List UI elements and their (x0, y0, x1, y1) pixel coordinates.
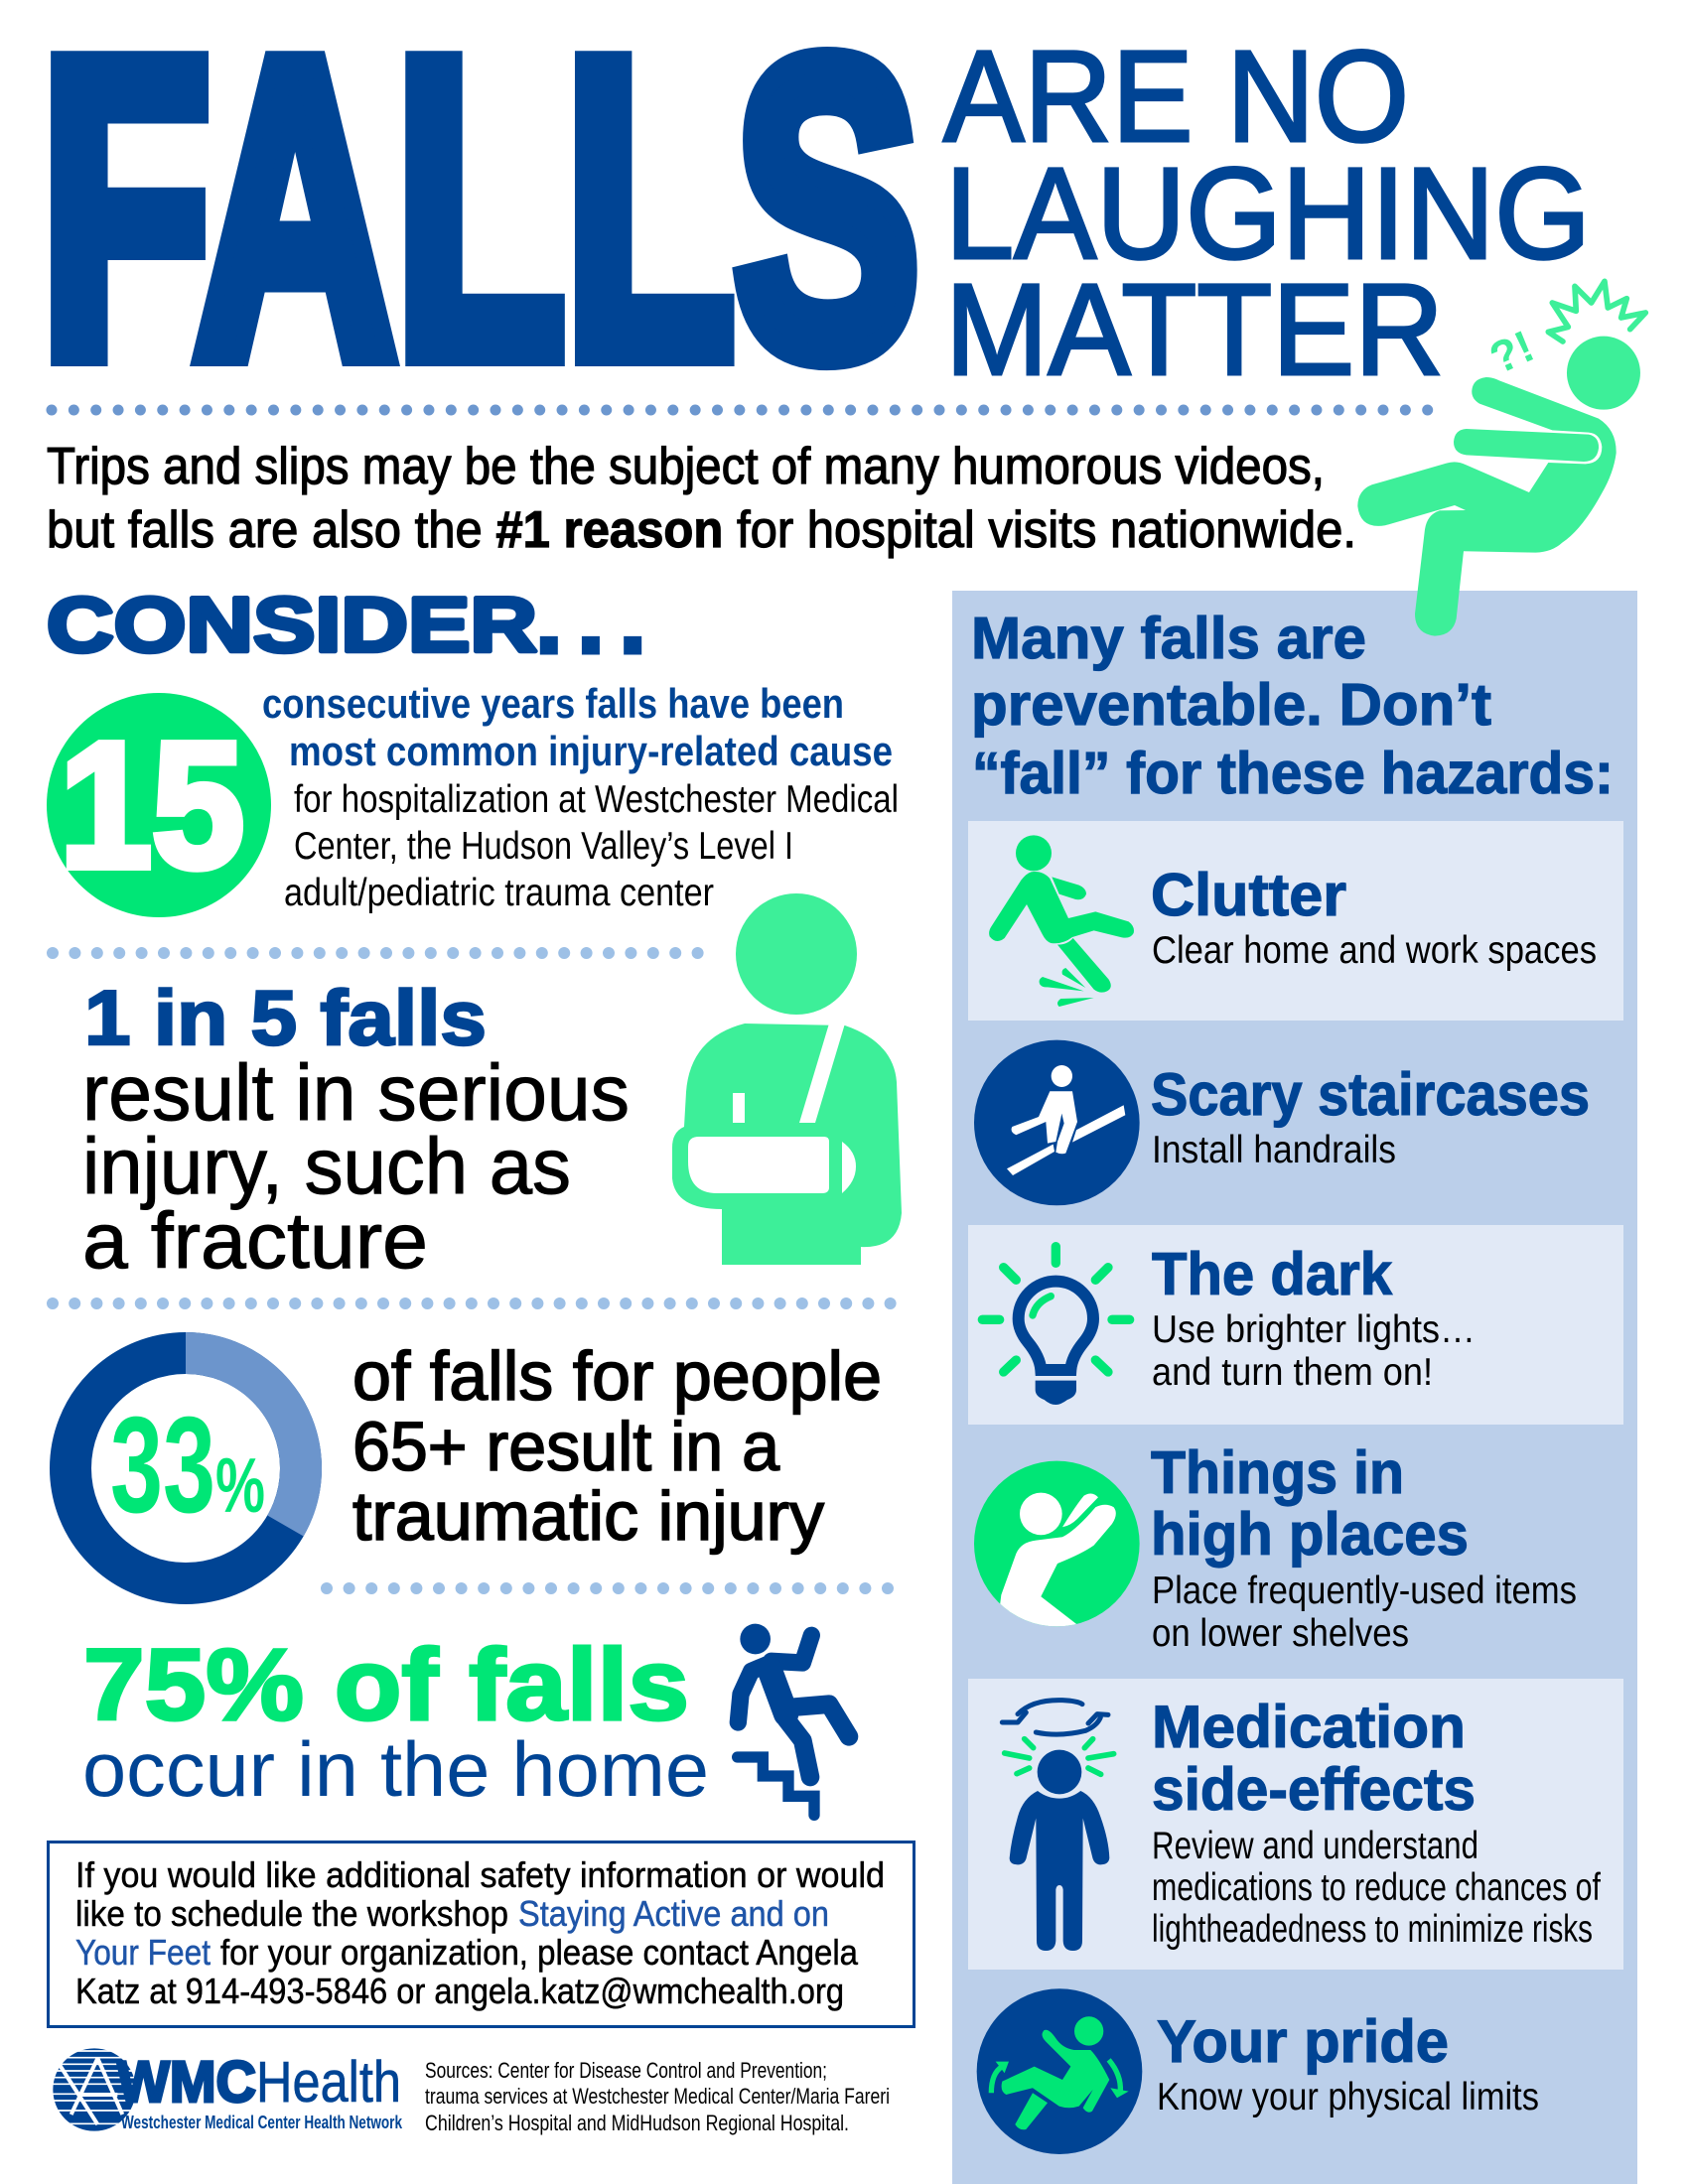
heading: hazards (971, 606, 1614, 806)
logo wordmark health: Health (256, 2050, 401, 2115)
item: scary staircases (974, 1040, 1590, 1205)
stat text: for hospitalization at Westchester Medical (294, 778, 899, 821)
text: sources: Sources: Center for Disease Control and Prevention; (425, 2058, 827, 2083)
heading: hazards: “fall” for these hazards: (972, 741, 1614, 806)
callout: contact box: for your organization, please contact Angela (220, 1932, 859, 1973)
stat text: adult/pediatric trauma center (284, 872, 714, 914)
title line: MATTER: MATTER (945, 256, 1444, 402)
card text: Review and understand (1152, 1825, 1478, 1867)
logo: WMC Health (53, 2048, 403, 2132)
card text (1152, 1308, 1476, 1394)
heading: hazards: Many falls are (971, 606, 1366, 671)
item text: Install handrails (1152, 1129, 1396, 1171)
stat text: consecutive years falls have been (262, 680, 844, 727)
intro text (47, 438, 1356, 559)
stat: 75 percent (82, 1628, 709, 1813)
icon: person with arm sling (672, 893, 902, 1265)
item text: Know your physical limits (1157, 2076, 1539, 2118)
stat: 1 in 5 falls (82, 974, 630, 1285)
card text: and turn them on! (1152, 1351, 1433, 1394)
item title: high places (1151, 1501, 1469, 1568)
stat: 15 consecutive years (47, 680, 899, 917)
icon: falling person (1357, 281, 1645, 636)
callout: contact box: Katz at 914-493-5846 or angela.katz@wmchealth.org (75, 1971, 844, 2011)
callout: contact box: Your Feet (75, 1932, 211, 1973)
item text: Place frequently-used items (1152, 1570, 1577, 1612)
heading: consider: ... (538, 581, 643, 668)
icon: falling person: ?! (1482, 321, 1541, 383)
title line: LAUGHING: LAUGHING (945, 140, 1591, 286)
callout: contact box: Staying Active and on (518, 1893, 829, 1934)
stat: 75 percent: occur in the home (82, 1725, 709, 1813)
icon: tripping person (989, 835, 1134, 1007)
card text (1152, 1825, 1601, 1951)
intro text: but falls are also the #1 reason for hospital visits nationwide. (47, 501, 1356, 559)
stat text: most common injury-related cause (289, 728, 893, 774)
text: sources: Children’s Hospital and MidHudson Regional Hospital. (425, 2111, 849, 2135)
card title: The dark (1152, 1241, 1393, 1307)
item title: Scary staircases (1151, 1061, 1590, 1128)
stat: 1 in 5 falls: result in serious (82, 1048, 630, 1137)
heading: consider: CONSIDER (47, 581, 537, 668)
stat text: 33 percent: traumatic injury (352, 1477, 824, 1555)
logo wordmark: WMC (117, 2050, 256, 2115)
stat text (262, 680, 899, 914)
icon: person slipping (977, 1988, 1142, 2154)
callout: contact box: If you would like additional safety information or would (75, 1854, 885, 1895)
card: medication side-effects (968, 1679, 1623, 1970)
card title: Medication (1152, 1694, 1466, 1760)
card: the dark (968, 1225, 1623, 1425)
item: things in high places (974, 1439, 1577, 1655)
stat text: Center, the Hudson Valley’s Level I (294, 825, 793, 868)
logo subtitle: Westchester Medical Center Health Network (121, 2113, 403, 2132)
icon: light bulb (982, 1247, 1130, 1405)
item: your pride (977, 1988, 1539, 2154)
card title (1152, 1694, 1476, 1823)
item title: Things in (1151, 1439, 1404, 1506)
item title (1151, 1439, 1469, 1568)
text: sources: trauma services at Westchester Medical Center/Maria Fareri (425, 2084, 890, 2109)
stat: 1 in 5 falls: 1 in 5 falls (84, 974, 487, 1061)
chart: 33 percent donut: 33 (110, 1389, 215, 1542)
stat: 1 in 5 falls: a fracture (82, 1196, 428, 1285)
badge: 15: 15 (60, 706, 244, 905)
card title: side-effects (1152, 1756, 1476, 1823)
callout: contact box: like to schedule the workshop (75, 1893, 508, 1934)
chart: 33 percent donut: % (215, 1441, 265, 1529)
item title: Your pride (1157, 2008, 1449, 2075)
panel: hazards background (952, 591, 1637, 2184)
stat: 75 percent: 75% of falls (83, 1628, 689, 1741)
title (41, 0, 1591, 443)
icon: person holding handrail (974, 1040, 1140, 1205)
icon: dizzy person (1002, 1701, 1114, 1951)
stat text: 33 percent (352, 1337, 882, 1555)
text: sources (425, 2058, 890, 2135)
icon: logo globe (53, 2048, 136, 2131)
chart: 33 percent donut (70, 1353, 301, 1583)
heading: consider (47, 581, 643, 668)
card text: Clear home and work spaces (1152, 929, 1597, 972)
item text: on lower shelves (1152, 1612, 1409, 1655)
title line: ARE NO: ARE NO (943, 23, 1409, 169)
icon: person falling on stairs (738, 1624, 849, 1815)
stat: 1 in 5 falls: injury, such as (82, 1122, 571, 1210)
icon: person reaching up (974, 1461, 1140, 1635)
stat text: 33 percent: 65+ result in a (352, 1408, 779, 1485)
stat text: 33 percent: of falls for people (352, 1337, 882, 1415)
card: clutter (968, 821, 1623, 1021)
item text (1152, 1570, 1577, 1655)
card title: Clutter (1151, 862, 1346, 928)
heading: hazards: preventable. Don’t (971, 672, 1491, 738)
callout: contact box (48, 1843, 914, 2027)
card text: Use brighter lights… (1152, 1308, 1476, 1351)
intro text: Trips and slips may be the subject of many humorous videos, (47, 438, 1325, 495)
